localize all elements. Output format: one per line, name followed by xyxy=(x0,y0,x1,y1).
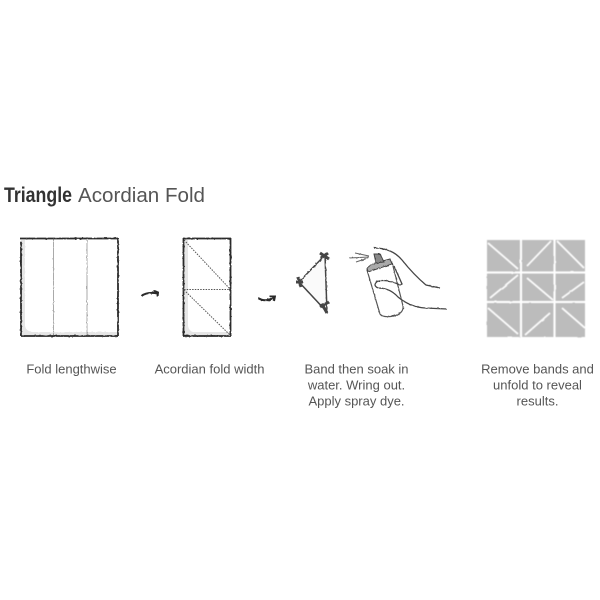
panel: step 2 accordion fold width xyxy=(183,238,231,336)
icon: hand xyxy=(374,248,447,309)
icon: spray can xyxy=(367,254,403,317)
caption: step 4: unfold to reveal xyxy=(493,378,582,392)
caption: step 3: water. Wring out. xyxy=(307,378,405,392)
caption: step 1: Fold lengthwise xyxy=(26,362,117,376)
panel: step 4 result pattern xyxy=(487,240,585,337)
title xyxy=(4,184,205,207)
caption: step 4: Remove bands and xyxy=(481,362,594,376)
arrow: step 2 to 3 xyxy=(258,296,275,301)
title: Acordian Fold xyxy=(78,185,205,207)
caption: step 2: Acordian fold width xyxy=(155,362,264,376)
caption: step 4: results. xyxy=(517,394,558,408)
caption: step 3: Apply spray dye. xyxy=(308,394,405,408)
panel: step 3 band and spray xyxy=(296,248,447,317)
caption: step 3: Band then soak in xyxy=(304,362,409,376)
icon: spray mist xyxy=(349,253,369,262)
panel: step 1 fold lengthwise xyxy=(20,238,118,336)
icon: banded triangle xyxy=(296,253,329,313)
title: Triangle xyxy=(4,184,72,207)
arrow: step 1 to 2 xyxy=(142,290,158,296)
